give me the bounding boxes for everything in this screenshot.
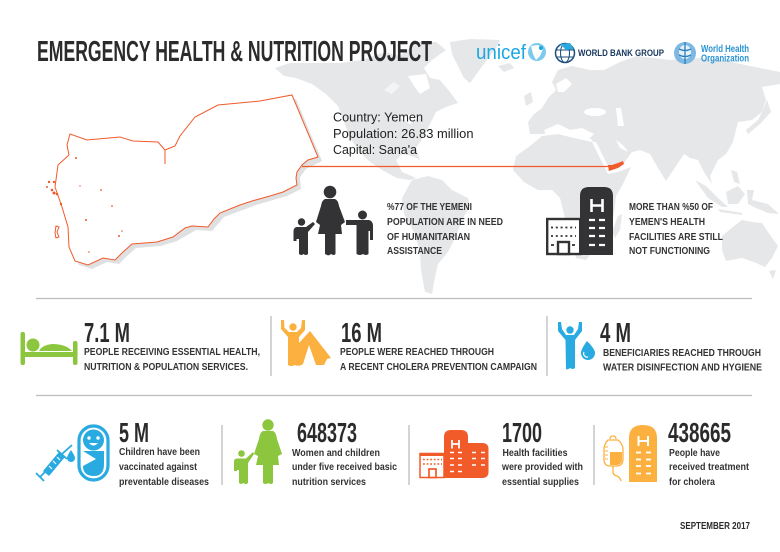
date footer: SEPTEMBER 2017 <box>680 521 750 532</box>
stat: 4 M water disinfection <box>558 317 762 374</box>
stat: 438665 treated for cholera <box>604 417 749 488</box>
stat: 648373 women and children: Women and children <box>292 447 380 459</box>
connector line to Yemen on world map <box>302 166 610 168</box>
logo: world health organization: Organization <box>701 54 749 64</box>
text: humanitarian need: ASSISTANCE <box>387 245 442 257</box>
stat: 438665 treated for cholera: for cholera <box>669 476 715 488</box>
stat: 5 M children vaccinated: vaccinated against <box>119 461 197 473</box>
stat: 438665 treated for cholera: People have <box>669 447 720 459</box>
country facts: Population: 26.83 million <box>333 126 474 141</box>
stat: 1700 health facilities supplied: Health facilities <box>502 447 568 459</box>
country facts <box>333 110 474 157</box>
logo: world bank group: WORLD BANK GROUP <box>578 48 664 58</box>
text: humanitarian need <box>387 201 503 257</box>
text: health facilities not functioning: FACILITIES ARE STILL <box>629 231 723 243</box>
world map background <box>275 39 780 294</box>
icon: family <box>294 186 373 255</box>
logo: unicef: unicef <box>476 42 526 64</box>
title: EMERGENCY HEALTH & NUTRITION PROJECT <box>37 36 432 68</box>
stat: 5 M children vaccinated: Children have been <box>119 446 200 458</box>
stat: 648373 women and children: 648373 <box>297 417 357 448</box>
text: humanitarian need: %77 OF THE YEMENI <box>387 201 472 213</box>
stat: 5 M children vaccinated: 5 M <box>119 417 149 448</box>
text: health facilities not functioning <box>629 201 723 257</box>
stat: 7.1 M essential health services <box>20 317 260 373</box>
stat: 7.1 M essential health services: PEOPLE RECEIVING ESSENTIAL HEALTH, <box>84 346 260 358</box>
stat: 648373 women and children: nutrition services <box>292 476 366 488</box>
stat: 1700 health facilities supplied: were provided with <box>501 461 583 473</box>
icon: syringe and swaddled baby <box>36 426 108 481</box>
text: health facilities not functioning: MORE THAN %50 OF <box>629 201 713 213</box>
stat: 648373 women and children <box>234 417 397 488</box>
stat: 5 M children vaccinated <box>36 417 209 488</box>
stat: 16 M cholera campaign: PEOPLE WERE REACHED THROUGH <box>340 346 494 358</box>
icon: hospital orange-red <box>420 430 488 478</box>
map: Yemen marker <box>608 161 624 171</box>
icon: person with water drop <box>558 322 595 369</box>
logo: world bank group <box>556 43 664 62</box>
icon: woman and child <box>234 419 282 484</box>
icon: IV bag and hospital <box>604 425 657 482</box>
icon: hospital dark <box>547 187 613 255</box>
text: health facilities not functioning: YEMEN'S HEALTH <box>629 216 705 228</box>
icon: person and tent <box>281 320 331 366</box>
icon: bed <box>20 332 78 365</box>
stat: 648373 women and children: under five received basic <box>292 461 397 473</box>
stat: 1700 health facilities supplied: essential supplies <box>502 476 579 488</box>
logo: world health organization: World Health <box>701 44 749 55</box>
text: humanitarian need: POPULATION ARE IN NEED <box>387 216 503 228</box>
text: health facilities not functioning: NOT FUNCTIONING <box>629 245 710 257</box>
stat: 1700 health facilities supplied: 1700 <box>502 417 542 448</box>
stat: 16 M cholera campaign: A RECENT CHOLERA PREVENTION CAMPAIGN <box>340 361 537 373</box>
country facts: Country: Yemen <box>333 110 423 124</box>
stat: 7.1 M essential health services: NUTRITION & POPULATION SERVICES. <box>84 361 248 373</box>
logo: world health organization <box>674 42 749 64</box>
text: humanitarian need: OF HUMANITARIAN <box>387 231 470 243</box>
stat: 4 M water disinfection: 4 M <box>600 317 631 348</box>
stat: 16 M cholera campaign <box>281 317 537 373</box>
stat: 5 M children vaccinated: preventable diseases <box>119 476 209 488</box>
stat: 438665 treated for cholera: received treatment <box>669 461 749 473</box>
stat: 16 M cholera campaign: 16 M <box>341 317 382 348</box>
map: Yemen outline <box>46 95 322 269</box>
stat: 7.1 M essential health services: 7.1 M <box>84 317 130 348</box>
country facts: Capital: Sana'a <box>333 142 418 157</box>
stat: 1700 health facilities supplied <box>420 417 583 488</box>
stat: 438665 treated for cholera: 438665 <box>668 417 731 448</box>
